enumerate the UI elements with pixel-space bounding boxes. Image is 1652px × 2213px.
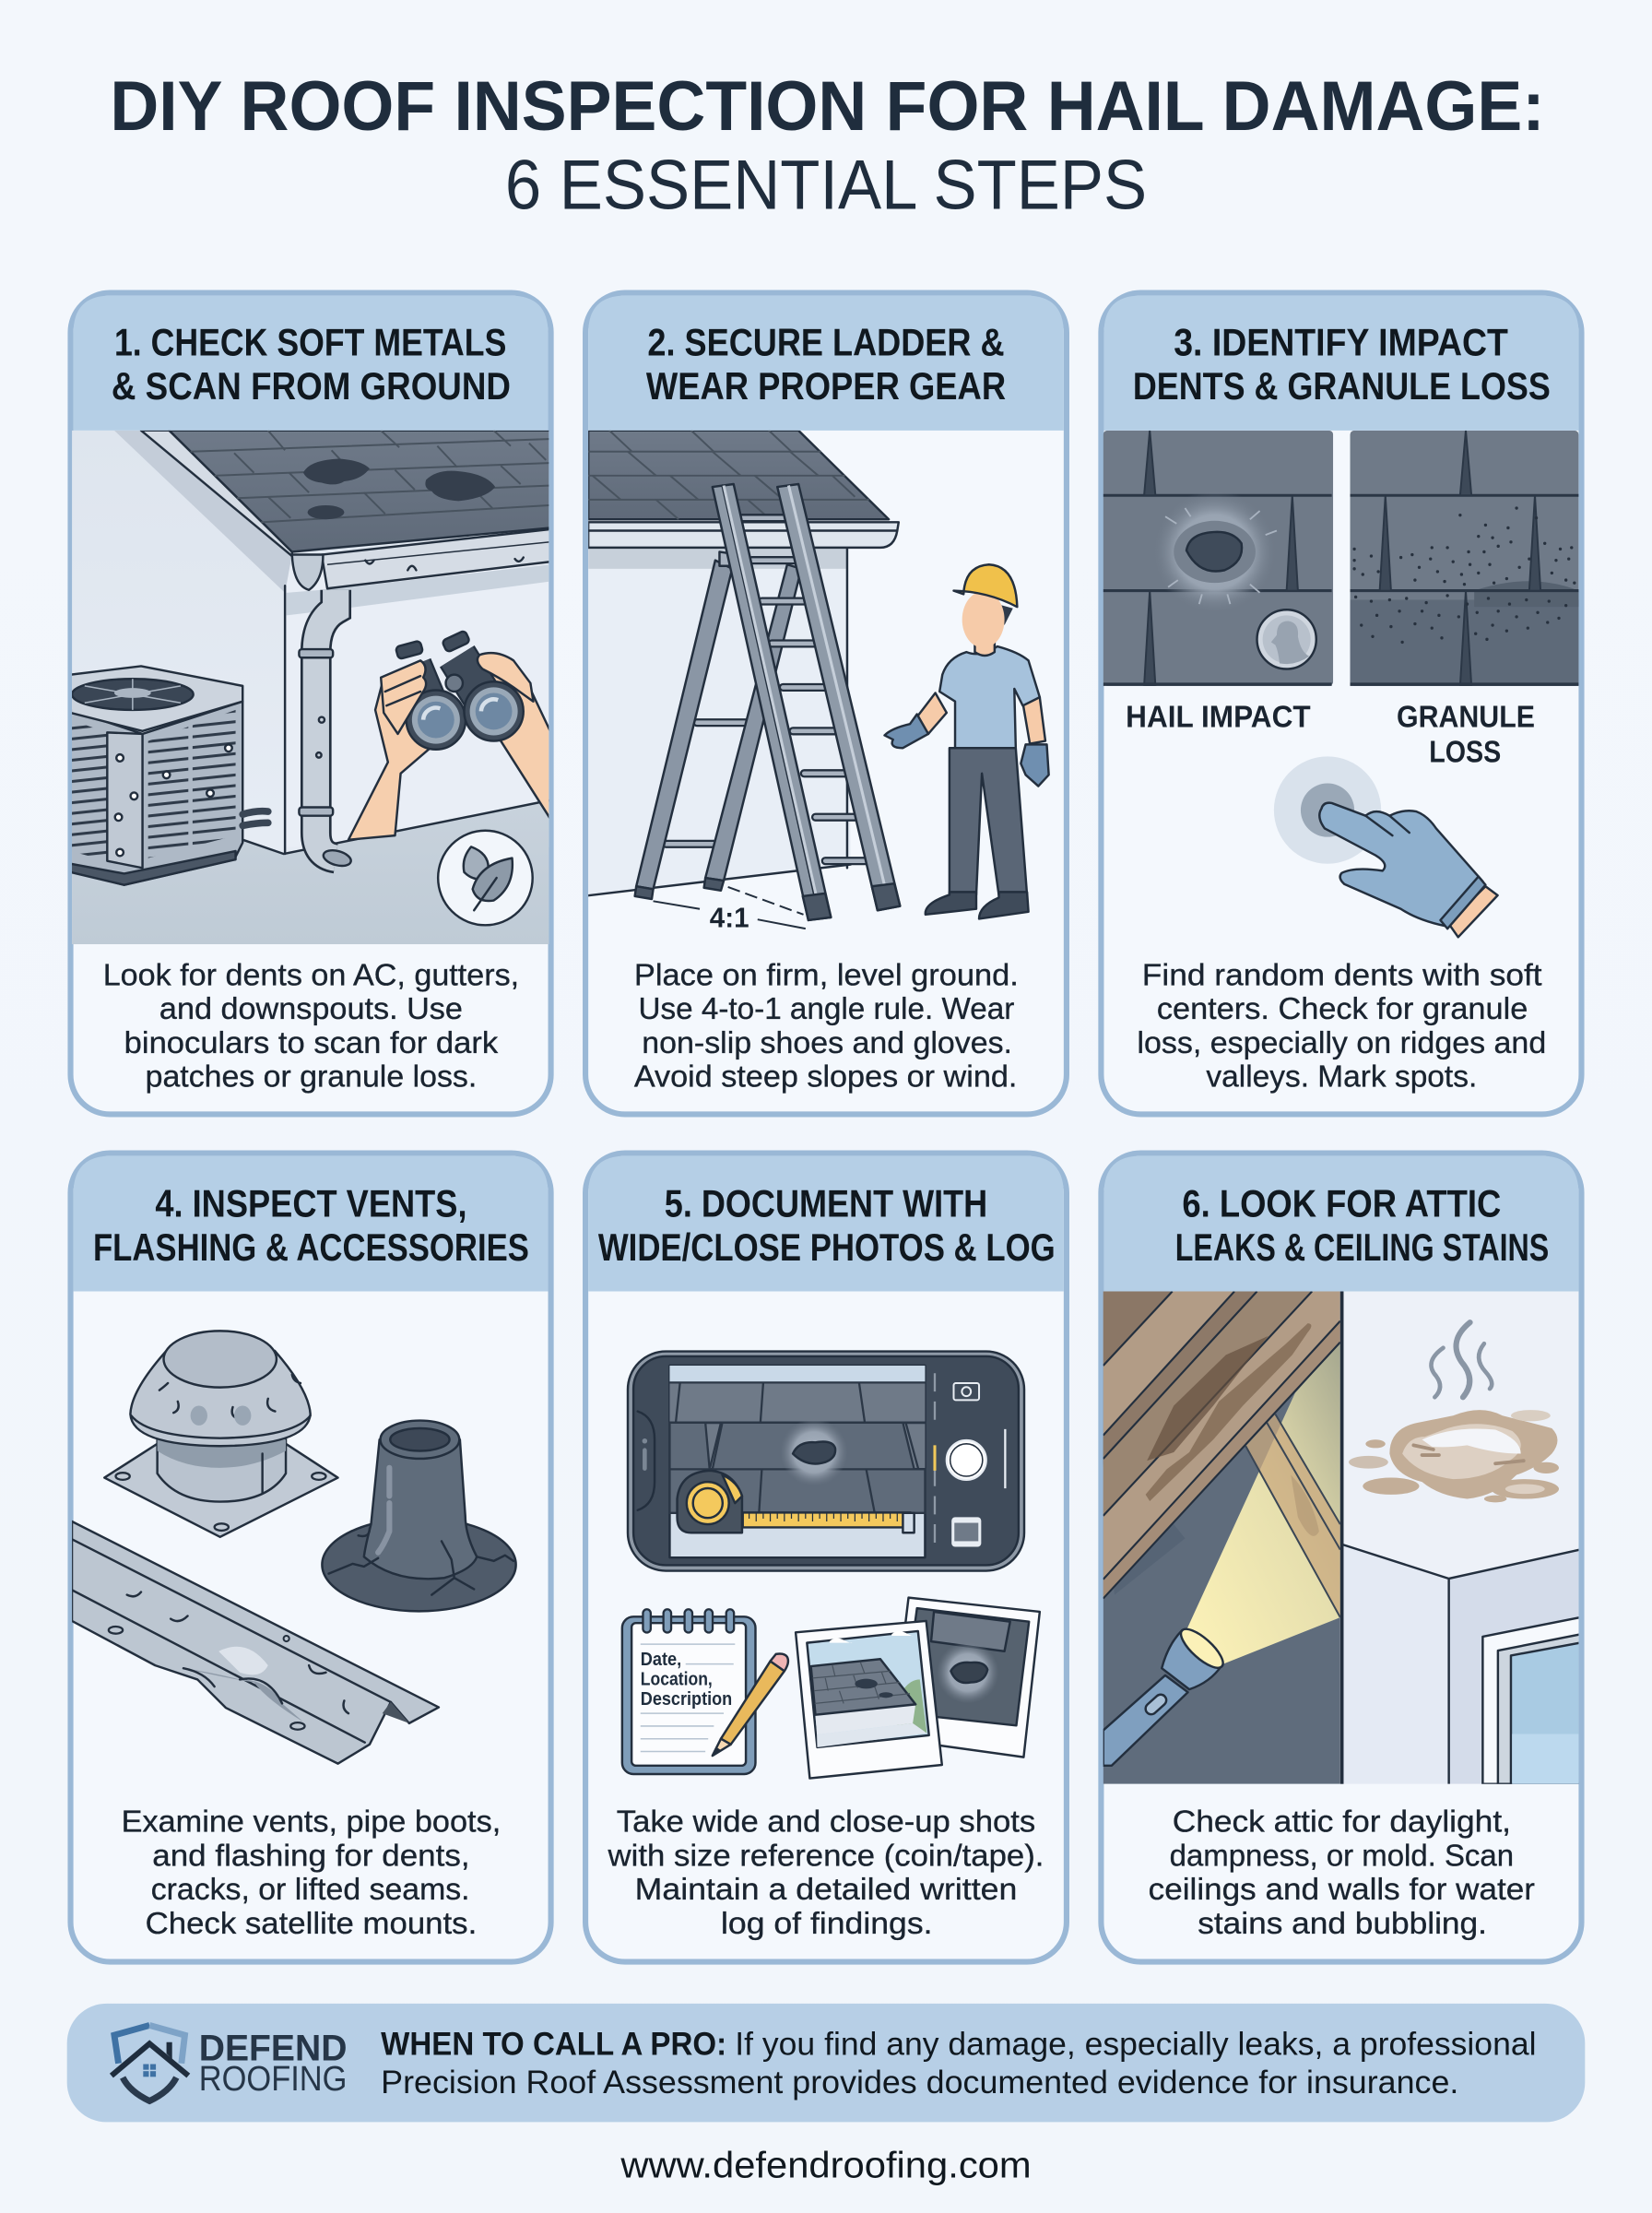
illustration: attic rafters with flashlight (1101, 1292, 1340, 1784)
labels: hail impact and granule loss (1126, 700, 1535, 770)
text: step 6 description: stains and bubbling. (1198, 1907, 1487, 1941)
roof with dark patches (141, 431, 550, 556)
tape measure (678, 1471, 914, 1533)
labels: hail impact and granule loss: GRANULE (1397, 700, 1535, 734)
icon: camera (953, 1383, 979, 1400)
close-up print (891, 1598, 1040, 1757)
icon: dented leaf badge (438, 831, 533, 925)
text: step 4 description: Check satellite mounts. (146, 1907, 477, 1941)
text: step 3 description: loss, especially on ridges and (1137, 1026, 1546, 1060)
text: step 3 description: Find random dents with soft (1142, 958, 1542, 992)
angle rule annotation 4:1 (654, 887, 806, 934)
text: step 3 description (1137, 958, 1546, 1095)
text: step 2 description: non-slip shoes and gloves. (642, 1026, 1012, 1060)
wide print (796, 1621, 942, 1779)
text: step 4 description: and flashing for dents, (152, 1839, 470, 1873)
callout text: WHEN TO CALL A PRO: (381, 2027, 726, 2063)
callout: when to call a pro (67, 2004, 1585, 2122)
heading: step 6 (1175, 1182, 1549, 1269)
text: step 1 description (103, 958, 519, 1095)
heading: step 2: 2. SECURE LADDER & (647, 322, 1005, 364)
panel: step 3 (1101, 293, 1581, 1114)
callout text (381, 2027, 1537, 2101)
panel: step 6 (1101, 1154, 1581, 1962)
heading: step 6: 6. LOOK FOR ATTIC (1182, 1182, 1501, 1225)
text: step 4 description: Examine vents, pipe boots, (122, 1805, 501, 1840)
heading: step 1 (112, 322, 511, 408)
text: step 4 description (122, 1805, 501, 1941)
text: step 6 description: ceilings and walls for water (1149, 1873, 1535, 1907)
downspout (299, 590, 353, 869)
labels: hail impact and granule loss: HAIL IMPACT (1126, 700, 1311, 734)
illustration: notebook with pencil (622, 1613, 788, 1774)
title: 6 ESSENTIAL STEPS (505, 147, 1147, 225)
window (1482, 1617, 1580, 1785)
logo: Defend Roofing: ROOFING (199, 2059, 347, 2099)
heading: step 5 (598, 1182, 1056, 1269)
heading: step 2: WEAR PROPER GEAR (646, 365, 1006, 408)
text: step 1 description: binoculars to scan for dark (124, 1026, 498, 1060)
text: step 3 description: centers. Check for granule (1157, 992, 1528, 1026)
text: step 2 description (634, 958, 1019, 1095)
text: step 6 description: dampness, or mold. Scan (1170, 1839, 1514, 1873)
notebook text: Location, (641, 1670, 713, 1690)
text: step 1 description: patches or granule loss. (146, 1060, 477, 1095)
icon: pencil (713, 1653, 788, 1756)
notebook text (641, 1650, 732, 1710)
heading: step 1: 1. CHECK SOFT METALS (114, 322, 506, 364)
extension ladder (713, 484, 900, 920)
text: step 6 description: Check attic for daylight, (1173, 1805, 1511, 1840)
heading: step 2 (646, 322, 1006, 408)
title (110, 67, 1545, 225)
heading: step 4: FLASHING & ACCESSORIES (93, 1226, 529, 1269)
panel: step 5 (585, 1154, 1067, 1962)
icon: steam (1431, 1322, 1492, 1397)
heading: step 6: LEAKS & CEILING STAINS (1175, 1226, 1549, 1269)
text: step 5 description: with size reference (coin/tape). (608, 1839, 1044, 1873)
text: step 4 description: cracks, or lifted seams. (151, 1873, 470, 1907)
heading: step 3 (1133, 322, 1551, 408)
text: step 1 description: Look for dents on AC, gutters, (103, 958, 519, 992)
heading: step 3: 3. IDENTIFY IMPACT (1174, 322, 1508, 364)
text: step 1 description: and downspouts. Use (159, 992, 463, 1026)
flashlight (1103, 1623, 1229, 1766)
illustration: ladder against house with worker (588, 431, 1049, 934)
labels: hail impact and granule loss: LOSS (1429, 736, 1501, 770)
heading: step 5: 5. DOCUMENT WITH (665, 1182, 987, 1225)
worker in hard hat (885, 564, 1049, 918)
text: step 6 description (1149, 1805, 1535, 1941)
title: DIY ROOF INSPECTION FOR HAIL DAMAGE: (110, 67, 1545, 146)
panel: step 4 (71, 1154, 551, 1962)
roof and gutter (588, 431, 899, 548)
text: step 5 description: Take wide and close-up shots (617, 1805, 1035, 1840)
text: step 5 description: Maintain a detailed written (635, 1873, 1017, 1907)
water stain (1349, 1410, 1559, 1502)
hands holding binoculars (348, 631, 550, 840)
text: step 5 description: log of findings. (721, 1907, 933, 1941)
icon: gloved hand pressing dent (1274, 756, 1498, 937)
text: step 5 description (608, 1805, 1044, 1941)
illustration: house corner with AC unit, gutter and binoculars (71, 431, 550, 944)
logo: Defend Roofing: DEFEND (199, 2029, 347, 2069)
text: step 2 description: Avoid steep slopes or wind. (634, 1060, 1017, 1095)
heading: step 1: & SCAN FROM GROUND (112, 365, 511, 408)
illustration: ceiling stain and window (1343, 1292, 1580, 1785)
footer: website: www.defendroofing.com (620, 2146, 1032, 2186)
text: step 3 description: valleys. Mark spots. (1206, 1060, 1477, 1095)
heading: step 4: 4. INSPECT VENTS, (155, 1182, 467, 1225)
illustration: shingle close-up of hail impact with coin (1103, 431, 1333, 686)
callout text: Precision Roof Assessment provides documented evidence for insurance. (381, 2065, 1458, 2101)
roof vent (104, 1331, 338, 1537)
cracked pipe boot (322, 1421, 516, 1611)
illustration: phone photographing hail dent with tape measure (628, 1352, 1024, 1571)
panel: step 1 (71, 293, 551, 1114)
gutter (292, 529, 550, 590)
stepladder rear frame (635, 551, 801, 899)
panel: step 2 (585, 293, 1067, 1114)
text: step 2 description: Use 4-to-1 angle rule. Wear (638, 992, 1014, 1026)
angle rule annotation 4:1: 4:1 (710, 903, 749, 934)
illustration: vent, pipe boot and flashing (72, 1331, 516, 1764)
illustration: shingle close-up of granule loss (1351, 431, 1578, 686)
text: step 2 description: Place on firm, level ground. (634, 958, 1019, 992)
heading: step 3: DENTS & GRANULE LOSS (1133, 365, 1551, 408)
AC unit (71, 666, 268, 885)
illustration: wide and close-up photo prints (796, 1598, 1040, 1779)
notebook text: Date, (641, 1650, 681, 1670)
heading: step 4 (93, 1182, 529, 1269)
logo: Defend Roofing (112, 2025, 347, 2101)
heading: step 5: WIDE/CLOSE PHOTOS & LOG (598, 1226, 1056, 1269)
notebook text: Description (641, 1689, 732, 1710)
dented flashing strip (72, 1521, 439, 1764)
callout text: If you find any damage, especially leaks, a professional (735, 2027, 1537, 2063)
